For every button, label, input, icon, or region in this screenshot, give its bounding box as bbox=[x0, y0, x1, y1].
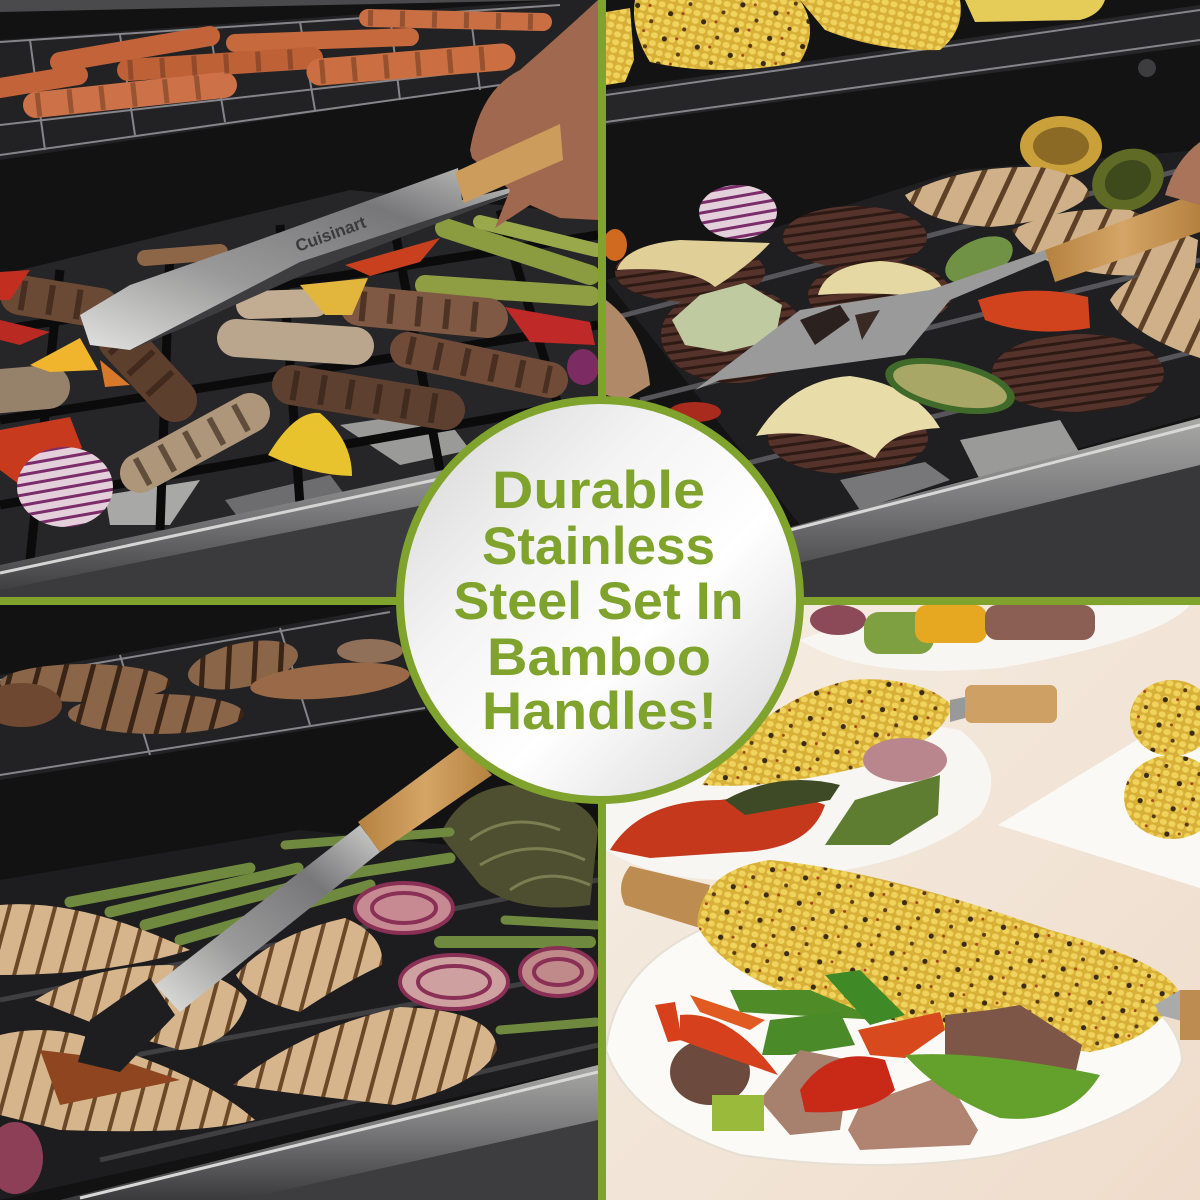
corn cob bbox=[697, 860, 1178, 1052]
right plate with corn bbox=[998, 680, 1200, 888]
basting brush bbox=[78, 745, 492, 1072]
lower grill bbox=[0, 785, 598, 1200]
tongs bamboo handle bbox=[455, 124, 563, 203]
brand label: Cuisinart bbox=[293, 213, 369, 256]
back plate bbox=[800, 605, 1190, 671]
chicken bbox=[0, 904, 190, 975]
lower grill with burgers bbox=[603, 116, 1200, 525]
chicken bbox=[905, 167, 1090, 227]
badge headline: Durable bbox=[492, 461, 705, 520]
panel: tongs and sausages bbox=[0, 0, 599, 597]
tongs bbox=[80, 168, 510, 350]
peppers and onion bbox=[345, 238, 440, 276]
onion bbox=[699, 185, 777, 239]
grill front stainless panel bbox=[60, 1065, 598, 1200]
panel: basting brush and chicken bbox=[0, 605, 598, 1200]
lemon and lime bbox=[1020, 116, 1102, 176]
badge headline: Steel Set In bbox=[454, 572, 744, 631]
burgers bbox=[783, 206, 927, 268]
badge headline bbox=[454, 461, 744, 741]
badge headline: Bamboo bbox=[487, 628, 711, 687]
brush bamboo handle bbox=[358, 745, 492, 852]
hand bbox=[470, 0, 598, 228]
silicone head bbox=[78, 978, 175, 1072]
centre badge bbox=[400, 400, 800, 800]
grill front stainless panel bbox=[0, 470, 443, 590]
spatula bamboo handle bbox=[1045, 192, 1200, 282]
spatula bbox=[695, 192, 1200, 390]
vegetables and sausage bbox=[730, 990, 880, 1020]
panel: spatula and burgers bbox=[603, 0, 1200, 597]
badge headline: Handles! bbox=[482, 682, 717, 741]
panel: plated corn and vegetables bbox=[606, 605, 1200, 1200]
zucchini bbox=[945, 236, 1013, 282]
grill front stainless panel bbox=[790, 418, 1200, 562]
hand bbox=[1165, 142, 1200, 205]
upper grill rack with hot dogs bbox=[0, 0, 598, 160]
lower grill with sausages bbox=[0, 190, 599, 565]
upper rack with sausages bbox=[0, 605, 430, 780]
upper rack with corn bbox=[606, 0, 1200, 125]
front plate bbox=[606, 860, 1200, 1165]
artichoke bbox=[440, 785, 598, 908]
asparagus bbox=[70, 832, 596, 1030]
badge headline: Stainless bbox=[482, 517, 715, 576]
red peppers bbox=[978, 291, 1090, 332]
corn handle bbox=[621, 866, 710, 928]
onions bbox=[355, 883, 596, 1009]
middle plate with corn and vegetables bbox=[606, 679, 1057, 880]
